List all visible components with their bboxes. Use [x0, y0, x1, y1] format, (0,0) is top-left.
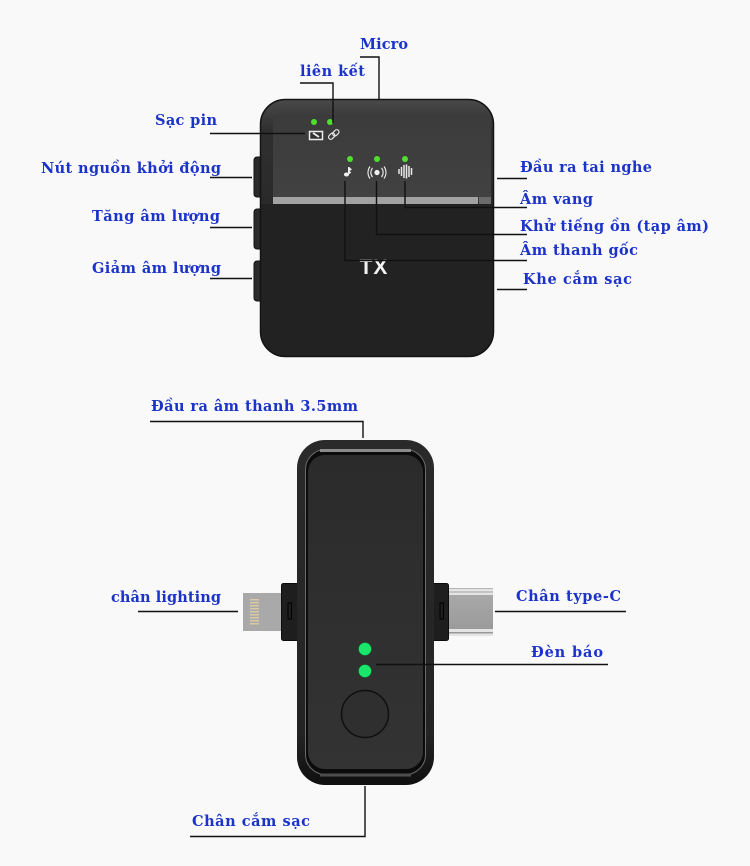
indicator lights [311, 119, 408, 162]
type-C connector [449, 588, 493, 636]
labels: receiver view [111, 398, 621, 830]
callout lines: receiver view [138, 422, 626, 836]
top highlight [320, 449, 411, 452]
labels: front view [41, 36, 709, 288]
power button [342, 690, 388, 738]
label: noise cancel: Khử tiếng ồn (tạp âm) [520, 217, 709, 235]
label: charge pin: Chân cắm sạc [192, 812, 310, 830]
callout lines: front view [210, 57, 527, 290]
label: type-C: Chân type-C [516, 588, 621, 605]
device: transmitter front view [254, 99, 494, 357]
label: headphone out: Đầu ra tai nghe [520, 159, 652, 176]
label: Micro: Micro [360, 36, 408, 53]
device body [260, 99, 494, 357]
label: lightning: chân lighting [111, 589, 221, 606]
label: audio out: Đầu ra âm thanh 3.5mm [151, 398, 359, 415]
icon: music note [344, 167, 352, 176]
device: receiver with connectors [243, 440, 493, 785]
label: charge: Sạc pin [155, 112, 217, 129]
label: original sound: Âm thanh gốc [519, 241, 638, 259]
connector collars [282, 584, 448, 640]
status lights [358, 642, 372, 678]
label: indicator: Đèn báo [531, 644, 603, 661]
label: volume down: Giảm âm lượng [92, 260, 221, 277]
device body [297, 440, 434, 785]
label: link: liên kết [300, 62, 365, 80]
icon: echo wave [399, 164, 412, 178]
icon: noise cancel [368, 166, 386, 178]
icon: battery [310, 132, 322, 140]
icon: link [328, 129, 340, 140]
bottom highlight [320, 774, 411, 776]
TX mark: TX [360, 256, 388, 279]
side buttons [254, 157, 264, 301]
screen [308, 455, 423, 769]
label: charging slot: Khe cắm sạc [523, 270, 632, 288]
label: echo: Âm vang [519, 190, 593, 208]
lightning connector [243, 593, 282, 631]
label: power button: Nút nguồn khởi động [41, 160, 221, 177]
label: volume up: Tăng âm lượng [92, 208, 220, 225]
